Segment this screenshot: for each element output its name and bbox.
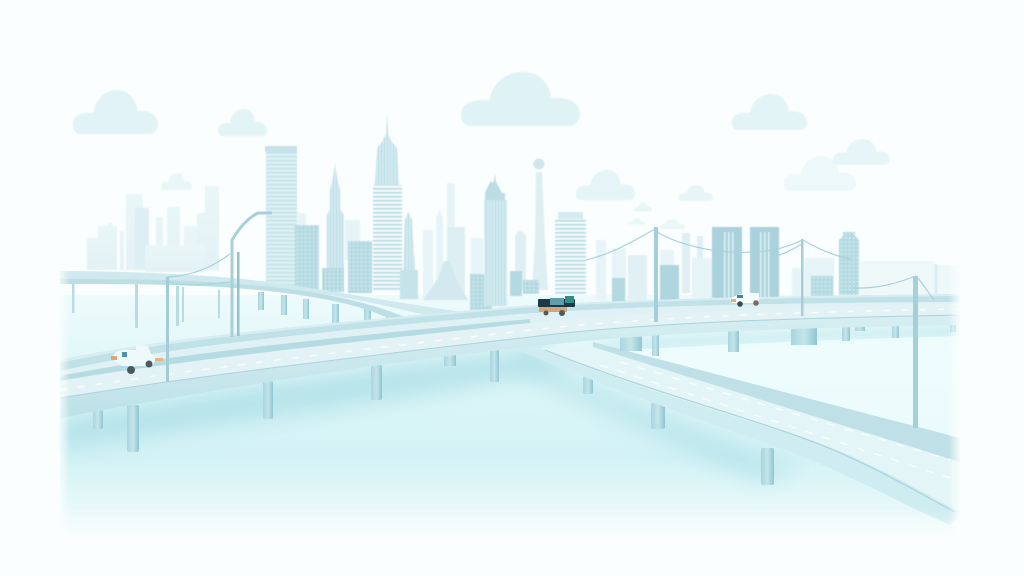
inner median (60, 319, 530, 381)
vehicle: dark bus (538, 296, 575, 316)
cables (167, 229, 934, 300)
cloud large centre (461, 72, 580, 126)
cloud far right (833, 139, 890, 165)
pavilion roof (423, 261, 468, 300)
tower: domed skyscraper (484, 172, 507, 306)
cloud tiny two (628, 218, 645, 224)
cloud small mid (678, 185, 713, 201)
tower: slender spire (327, 162, 344, 270)
edge fade: left (40, 250, 70, 550)
tower: dark low block (470, 274, 492, 310)
deck surface (60, 303, 960, 398)
tower: window block (348, 241, 372, 293)
main elevated road (60, 294, 960, 418)
tower: twin right (750, 227, 779, 298)
edge fade: bottom (40, 510, 980, 550)
tower: left low blocks (510, 271, 539, 296)
tower: art deco skyscraper (373, 112, 402, 291)
pole far right (913, 276, 918, 428)
road guardrail (545, 350, 955, 512)
cloud faint left (161, 173, 192, 190)
lane dashes (60, 309, 960, 390)
lower right road pillars (583, 376, 774, 485)
tower: low block (322, 268, 344, 292)
clouds (73, 72, 890, 229)
cloud tiny three (659, 219, 685, 229)
road fascia (513, 346, 960, 525)
utility poles and cables (166, 213, 934, 428)
tower: small dark block (612, 278, 625, 302)
street lamp (232, 213, 272, 337)
cloud mid (576, 170, 635, 200)
pole left (166, 277, 169, 382)
guardrail (60, 315, 960, 398)
tower: twin left (712, 227, 742, 298)
tower: striped tall block (265, 146, 297, 286)
lower right road (513, 342, 960, 525)
tower: mid block (660, 265, 679, 301)
cloud faint right (784, 156, 856, 191)
tower: dark spire (400, 212, 418, 299)
far curved ramp with pillars (60, 271, 470, 328)
back barrier (60, 294, 960, 371)
pole centre (654, 227, 658, 322)
ramp block pillars (258, 292, 392, 325)
gap between barrier and deck (60, 302, 960, 381)
road barrier (593, 342, 960, 462)
ramp thin pillars (72, 280, 220, 328)
tower: white striped block (555, 212, 586, 295)
tower: dark block (295, 225, 319, 291)
back barrier top highlight (60, 294, 960, 363)
pole right (801, 239, 804, 316)
vehicle: white truck (111, 344, 163, 374)
ramp fascia (60, 279, 412, 320)
far skyline, middle and right (297, 183, 960, 300)
ground plane (60, 295, 960, 545)
far skyline, left (87, 186, 219, 272)
tower: needle with sphere (532, 158, 548, 290)
cloud small left (218, 109, 267, 136)
deck fascia (60, 315, 960, 418)
main road pillars (93, 320, 956, 452)
vehicle: white car (730, 293, 759, 307)
road surface (540, 344, 960, 512)
tower: right stepped block (839, 232, 859, 295)
cloud tiny one (634, 202, 652, 212)
cloud large left (73, 90, 158, 134)
edge fade: right (948, 250, 978, 550)
road lane dashes (600, 362, 950, 478)
tower: latticed low block (811, 276, 833, 296)
city towers (265, 112, 859, 310)
cloud upper right (732, 94, 807, 130)
ramp deck (60, 271, 470, 318)
